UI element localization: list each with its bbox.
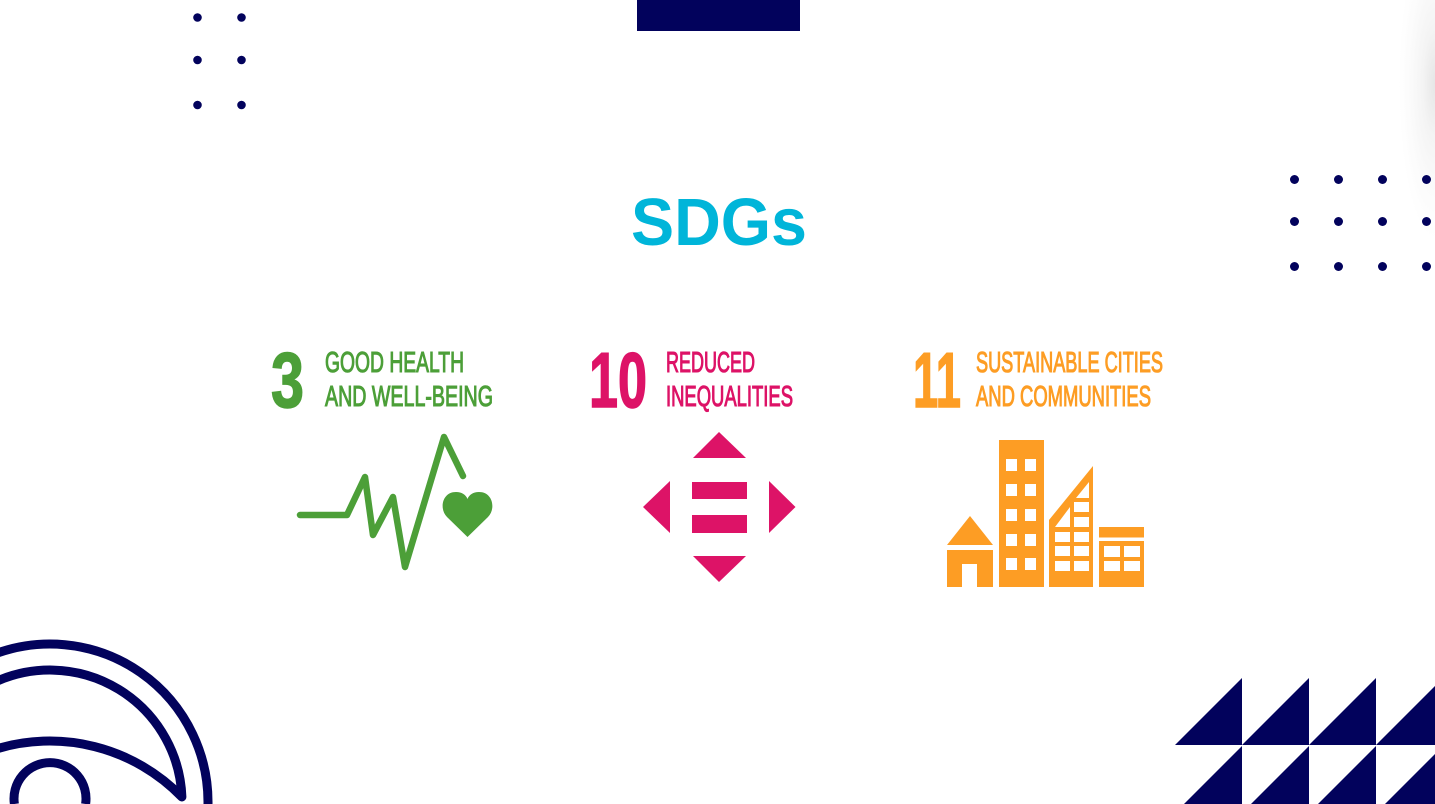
goal 3 number: 3	[271, 336, 304, 424]
title: SDGs	[631, 185, 807, 260]
goal 11 heading: AND COMMUNITIES	[976, 381, 1151, 413]
dot grid: top left	[193, 13, 246, 109]
dot grid: right	[1290, 175, 1431, 271]
goal 10 number: 10	[589, 336, 647, 424]
goal 10 heading: INEQUALITIES	[666, 381, 793, 413]
decoration: triangle pattern bottom right	[1175, 678, 1435, 804]
goal 11 heading	[976, 347, 1163, 413]
goal 3: good health and well-being	[271, 336, 493, 567]
decoration: eye arcs bottom left	[0, 644, 208, 804]
goal 10: reduced inequalities	[589, 336, 796, 582]
top navy bar	[637, 0, 800, 31]
icon: heartbeat line	[300, 437, 463, 567]
goal 3 heading: AND WELL-BEING	[325, 381, 493, 413]
goal 11 heading: SUSTAINABLE CITIES	[976, 347, 1163, 379]
goal 11: sustainable cities and communities	[913, 336, 1163, 587]
goal 3 heading: GOOD HEALTH	[325, 347, 464, 379]
corner shadow: top right	[1375, 0, 1435, 260]
goal 10 heading	[666, 347, 793, 413]
goal 10 heading: REDUCED	[666, 347, 755, 379]
goal 11 number: 11	[913, 336, 961, 424]
icon: heart	[443, 492, 492, 537]
goal 3 heading	[325, 347, 493, 413]
icon: four arrows and equals sign	[643, 432, 796, 582]
icon: city buildings	[947, 440, 1144, 587]
